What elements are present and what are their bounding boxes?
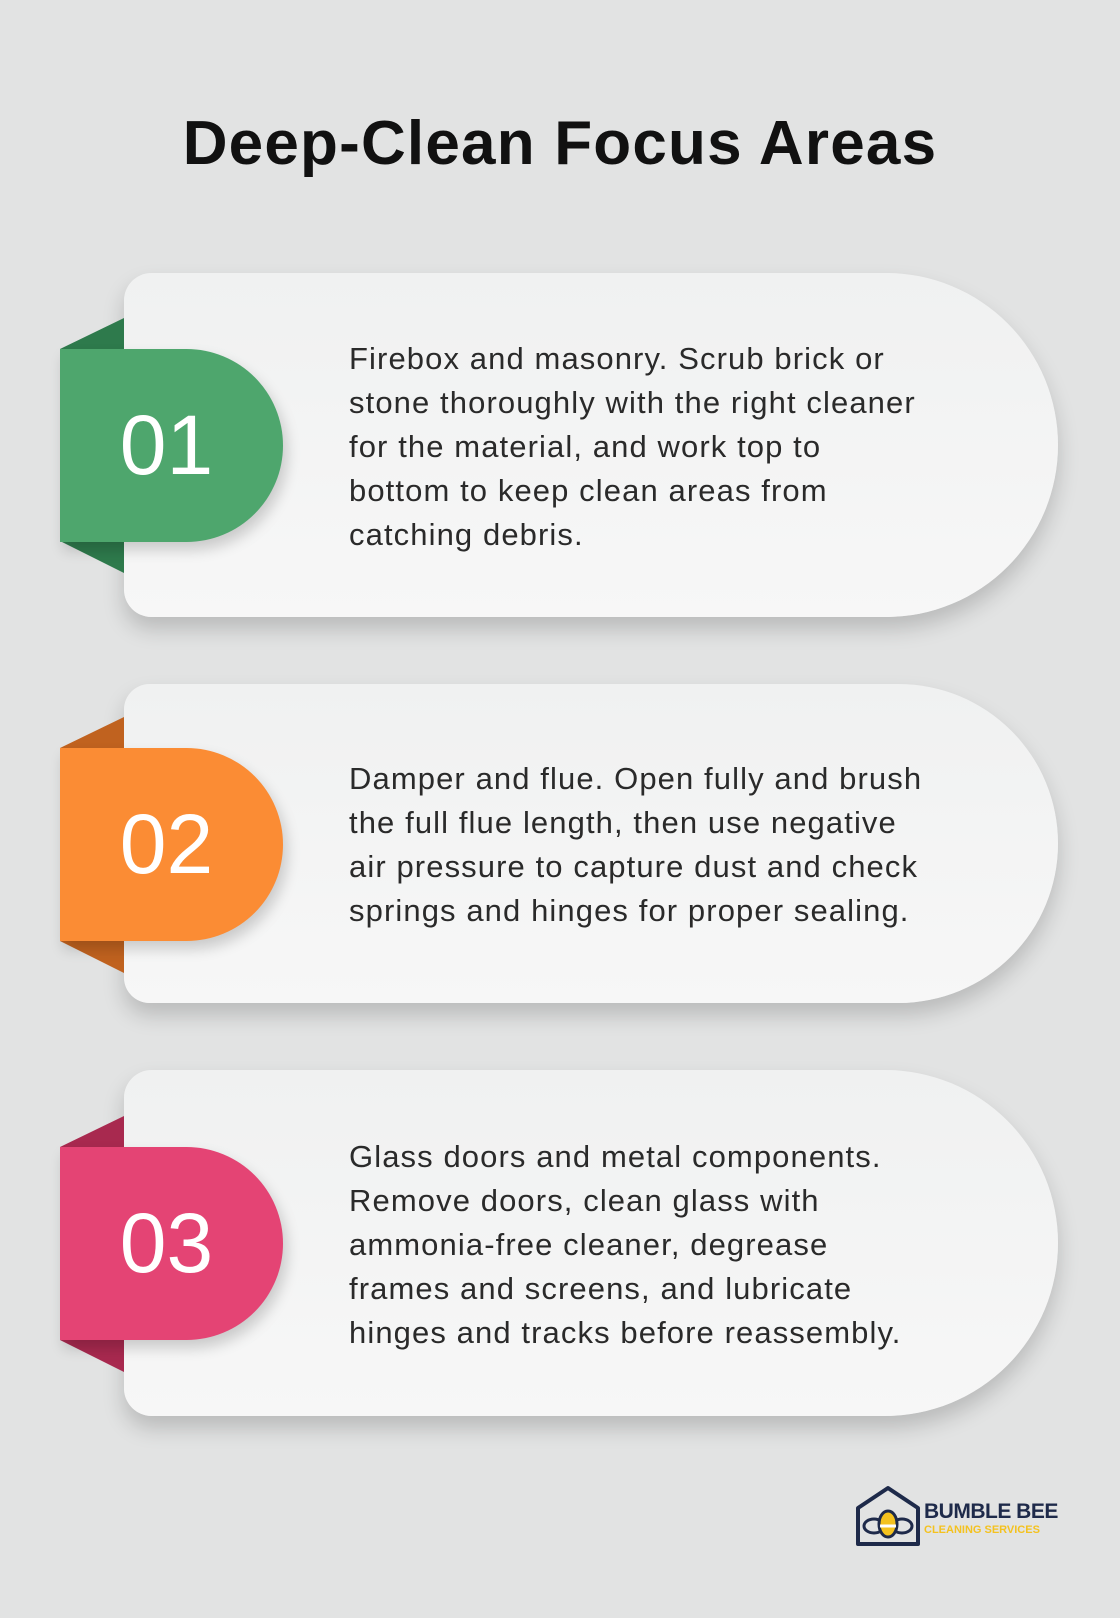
badge 01: 01 — [120, 398, 213, 492]
text 3: frames and screens, and lubricate — [349, 1271, 852, 1306]
icon: bee house — [856, 1486, 920, 1546]
text 1: stone thoroughly with the right cleaner — [349, 385, 916, 420]
text 2 — [349, 761, 922, 928]
logo: CLEANING SERVICES — [924, 1524, 1040, 1536]
fold triangles 1 — [60, 318, 124, 573]
text 1: bottom to keep clean areas from — [349, 473, 828, 508]
text 3: ammonia-free cleaner, degrease — [349, 1227, 828, 1262]
badge 03 — [60, 1147, 283, 1340]
badge 02: 02 — [120, 797, 213, 891]
card 2 — [124, 684, 1058, 1003]
text 3: Glass doors and metal components. — [349, 1139, 882, 1174]
panel: step 2 — [58, 684, 1066, 1024]
text 3 — [349, 1139, 902, 1350]
badge 01 — [60, 349, 283, 542]
panel: step 3 — [58, 1070, 1066, 1436]
text 2: Damper and flue. Open fully and brush — [349, 761, 922, 796]
title: Deep-Clean Focus Areas — [183, 109, 937, 178]
text 1: Firebox and masonry. Scrub brick or — [349, 341, 885, 376]
card 3 — [124, 1070, 1058, 1416]
text 1 — [349, 341, 916, 552]
badge 03: 03 — [120, 1196, 213, 1290]
fold triangles 3 — [60, 1116, 124, 1372]
text 2: air pressure to capture dust and check — [349, 849, 918, 884]
panel: step 1 — [58, 273, 1066, 638]
logo text: BUMBLE BEE — [924, 1500, 1058, 1523]
text 1: catching debris. — [349, 517, 584, 552]
logo — [856, 1486, 1058, 1546]
text 1: for the material, and work top to — [349, 429, 821, 464]
fold triangles 2 — [60, 717, 124, 973]
text 3: Remove doors, clean glass with — [349, 1183, 820, 1218]
card 1 — [124, 273, 1058, 617]
text 2: springs and hinges for proper sealing. — [349, 893, 910, 928]
text 3: hinges and tracks before reassembly. — [349, 1315, 902, 1350]
badge 02 — [60, 748, 283, 941]
text 2: the full flue length, then use negative — [349, 805, 897, 840]
